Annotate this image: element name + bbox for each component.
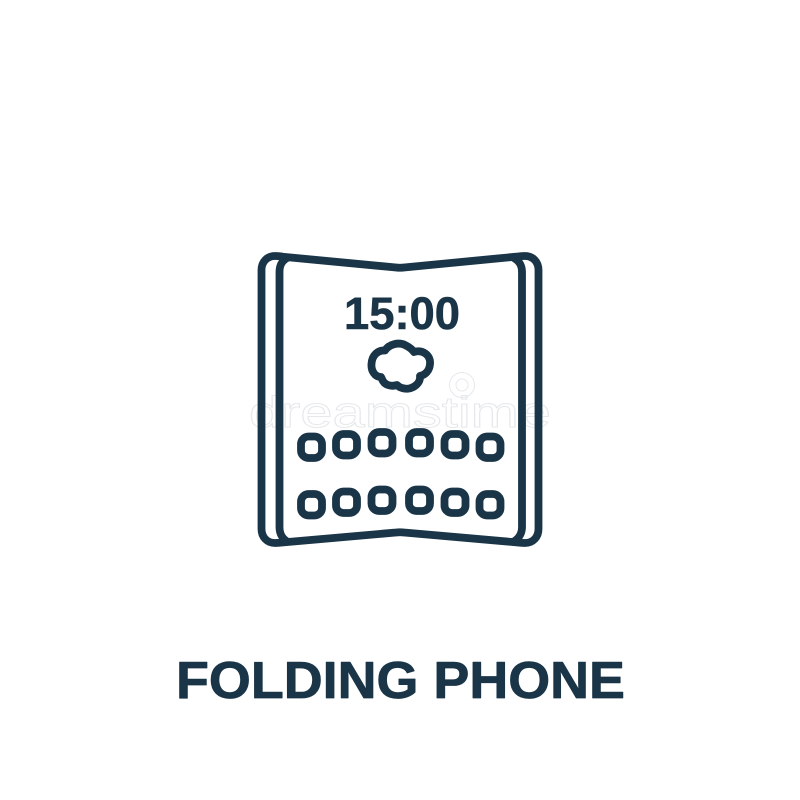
inner screen right edge — [514, 258, 522, 542]
title: FOLDING PHONE — [176, 652, 625, 710]
watermark — [249, 372, 551, 437]
clock time: 15:00 — [344, 288, 460, 339]
inner screen left edge — [280, 258, 287, 542]
icon: folding phone — [262, 256, 538, 543]
app icons row 1 — [301, 432, 500, 458]
app icons row 2 — [301, 490, 500, 516]
phone outer body — [262, 256, 538, 543]
weather cloud icon — [371, 344, 430, 389]
watermark: dreamstime — [249, 388, 551, 437]
